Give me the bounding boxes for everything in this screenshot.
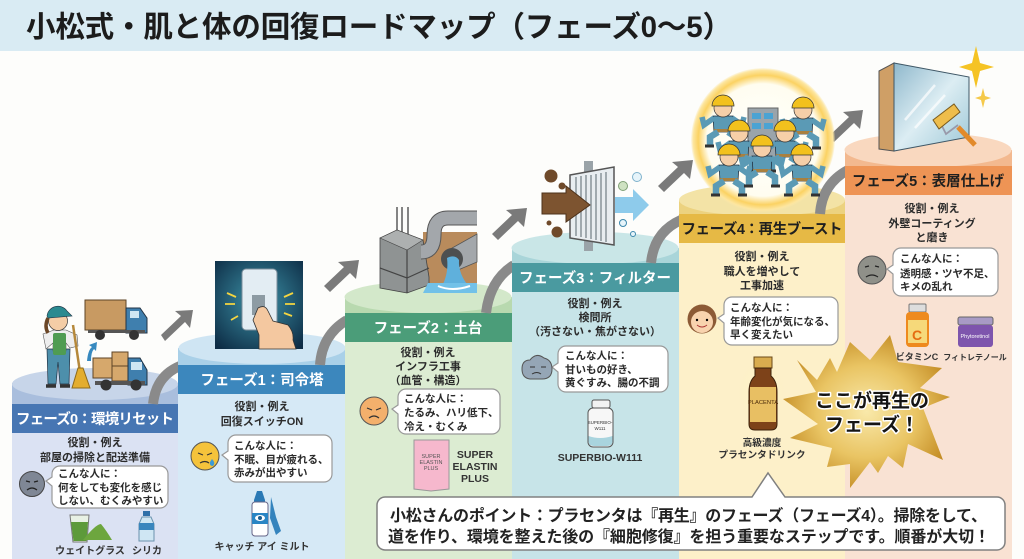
product labels: ウェイトグラス <box>55 544 125 557</box>
product label: キャッチ アイ ミルト <box>214 541 310 553</box>
phase 5 speech bubble <box>887 248 998 296</box>
arc arrow: phase 2 to 3 <box>486 265 514 313</box>
icon: dull grey face <box>858 256 886 284</box>
phase 3 heading: フェーズ3：フィルター <box>519 269 671 287</box>
worker with broom <box>43 306 90 388</box>
product labels: ビタミンC <box>896 351 939 362</box>
starburst callout: フェーズ！ <box>825 413 919 436</box>
callout: Komatsu's point: 道を作り、環境を整えた後の『細胞修復』を担う重要なステップです。順番が大切！ <box>388 527 990 546</box>
phase 2 role text: インフラ工事 <box>395 359 461 373</box>
illustration: light switch <box>215 261 303 349</box>
panel: phase 2 <box>344 281 512 559</box>
phase 0 role text <box>40 435 150 464</box>
phase 0 speech bubble: しない、むくみやすい <box>58 495 163 507</box>
title banner: 小松式・肌と体の回復ロードマップ（フェーズ0～5） <box>26 10 732 44</box>
panel: phase 3 <box>512 232 679 559</box>
starburst callout <box>783 335 950 488</box>
icon: placenta drink bottle: PLACENTA <box>748 400 778 406</box>
phase 0 speech bubble: 何をしても変化を感じ <box>58 481 162 494</box>
phase 1 role text: 回復スイッチON <box>221 414 303 428</box>
phase 2 role text: （血管・構造） <box>390 373 466 387</box>
product label <box>718 436 806 461</box>
phase 4 speech bubble <box>718 297 838 345</box>
phase 1 heading: フェーズ1：司令塔 <box>200 371 324 389</box>
phase 2 speech bubble: 冷え・むくみ <box>404 420 468 433</box>
icon: worried orange face <box>360 397 388 425</box>
phase 0 role text: 部屋の掃除と配送準備 <box>40 450 150 464</box>
callout: Komatsu's point: 小松さんのポイント：プラセンタは『再生』のフェーズ（フェーズ4）。掃除をして、 <box>390 506 987 525</box>
phase 4 role text <box>724 249 800 292</box>
phase 2 heading: フェーズ2：土台 <box>374 319 483 337</box>
panel: phase 1 <box>178 332 346 559</box>
phase 5 speech bubble: こんな人に： <box>900 253 963 265</box>
icon: supplement bottle <box>588 400 613 447</box>
icon: grey cloud face <box>522 355 552 379</box>
phase 4 speech bubble: 早く変えたい <box>730 328 793 341</box>
arrow: phase 3 to 4 <box>658 160 693 192</box>
phase 0 role text: 役割・例え <box>68 435 122 449</box>
icon: vitamin C bottle: C <box>912 327 922 343</box>
phase 2 speech bubble: こんな人に： <box>404 393 467 405</box>
phase 4 heading: フェーズ4：再生ブースト <box>682 220 842 238</box>
icon: pink supplement pouch <box>414 440 449 491</box>
icon: pink supplement pouch: PLUS <box>424 466 439 472</box>
icon: pink supplement pouch: ELASTIN <box>420 460 442 466</box>
phase 2 role text <box>390 345 466 387</box>
phase 5 role text: 外壁コーティング <box>888 216 976 230</box>
phase 5 speech bubble: 透明感・ツヤ不足、 <box>900 267 994 280</box>
icon: pink supplement pouch: SUPER <box>422 454 441 460</box>
illustration: filter with sludge and clean flow <box>542 161 649 251</box>
phase 3 speech bubble: 黄ぐすみ、腸の不調 <box>565 376 660 389</box>
illustration: workers in golden glow <box>691 68 835 212</box>
icon: eye drops <box>252 491 281 536</box>
icon: supplement bottle: W111 <box>594 426 606 431</box>
phase 2 role text: 役割・例え <box>400 345 456 359</box>
phase 4 role text: 役割・例え <box>734 249 790 263</box>
arrow: phase 0 to 1 <box>161 310 193 341</box>
icon: tired grey face <box>20 472 44 496</box>
product labels: フィトレテノール <box>943 353 1007 362</box>
arc arrow: phase 4 to 5 <box>820 170 848 214</box>
icon: placenta drink bottle <box>732 351 792 435</box>
phase 5 role text: と磨き <box>916 230 948 244</box>
illustration: worker and trucks <box>43 300 147 390</box>
phase 4 speech bubble: こんな人に： <box>730 302 793 314</box>
phase 1 speech bubble: 赤みが出やすい <box>234 466 308 479</box>
phase 0 speech bubble <box>46 466 168 508</box>
title banner <box>0 0 1024 51</box>
phase 4 speech bubble: 年齢変化が気になる、 <box>730 315 835 328</box>
arc arrow: phase 1 to 2 <box>320 320 347 365</box>
panel: phase 4 <box>679 184 845 559</box>
phase 4 role text: 工事加速 <box>740 278 784 292</box>
phase 3 role text <box>529 296 661 338</box>
callout: Komatsu's point <box>377 473 1005 550</box>
phase 3 speech bubble: こんな人に： <box>565 350 628 362</box>
illustration: concrete and pipes <box>380 207 477 293</box>
product label: SUPERBIO-W111 <box>558 452 642 464</box>
phase 2 speech bubble <box>392 389 500 434</box>
icon: sleepy yellow face <box>191 442 219 470</box>
phase 1 speech bubble: 不眠、目が疲れる、 <box>234 453 328 466</box>
upward blue arrow <box>87 342 97 361</box>
product labels: シリカ <box>132 545 162 557</box>
phase 3 role text: （汚さない・焦がさない） <box>529 324 661 338</box>
illustration: polished wall with roller <box>879 46 994 151</box>
phase 3 speech bubble: 甘いもの好き、 <box>565 363 638 376</box>
icon: phytoretinol jar <box>958 317 993 347</box>
icon: phytoretinol jar: Phytoretinol <box>960 334 990 340</box>
icon: vitamin C bottle <box>906 304 929 347</box>
product labels <box>55 544 162 557</box>
phase 3 role text: 検問所 <box>578 310 612 324</box>
panel: phase 5 <box>844 133 1012 559</box>
product label: SUPER <box>457 449 493 461</box>
product label <box>453 449 497 485</box>
phase 1 speech bubble <box>222 435 332 482</box>
icon: silica water bottle <box>139 511 154 541</box>
gold sparkle large <box>959 46 994 88</box>
product label: PLUS <box>461 473 489 485</box>
phase 4 role text: 職人を増やして <box>724 264 800 278</box>
upper delivery truck <box>85 300 147 340</box>
panel: phase 0 <box>12 368 178 559</box>
arrow: phase 4 to 5 <box>829 110 863 142</box>
phase 5 role text: 役割・例え <box>904 201 960 215</box>
arrow: phase 2 to 3 <box>492 208 527 240</box>
arc arrow: phase 3 to 4 <box>651 220 681 263</box>
phase 1 speech bubble: こんな人に： <box>234 440 297 452</box>
worker team <box>702 95 824 195</box>
icon: smiling woman face <box>688 304 716 334</box>
phase 5 role text <box>888 201 976 244</box>
icon: wheatgrass glass <box>70 515 112 542</box>
product label: プラセンタドリンク <box>718 449 806 461</box>
product labels <box>896 351 1007 362</box>
phase 5 speech bubble: キメの乱れ <box>900 280 953 293</box>
arrow: phase 1 to 2 <box>324 260 359 292</box>
gold sparkle small <box>975 88 991 108</box>
building <box>748 108 778 162</box>
starburst callout: ここが再生の <box>815 389 929 412</box>
product label: 高級濃度 <box>743 436 782 449</box>
phase 3 speech bubble <box>552 346 668 392</box>
phase 5 heading: フェーズ5：表層仕上げ <box>852 172 1005 190</box>
arc arrow: phase 0 to 1 <box>153 366 180 404</box>
lower delivery truck <box>93 352 147 390</box>
phase 1 role text: 役割・例え <box>234 399 290 413</box>
phase 0 heading: フェーズ0：環境リセット <box>16 410 174 428</box>
phase 3 role text: 役割・例え <box>568 296 622 310</box>
phase 0 speech bubble: こんな人に： <box>58 468 121 480</box>
product label: ELASTIN <box>453 461 497 473</box>
phase 1 role text <box>221 399 303 428</box>
phase 2 speech bubble: たるみ、ハリ低下、 <box>404 406 498 419</box>
icon: supplement bottle: SUPERBIO- <box>588 420 613 425</box>
